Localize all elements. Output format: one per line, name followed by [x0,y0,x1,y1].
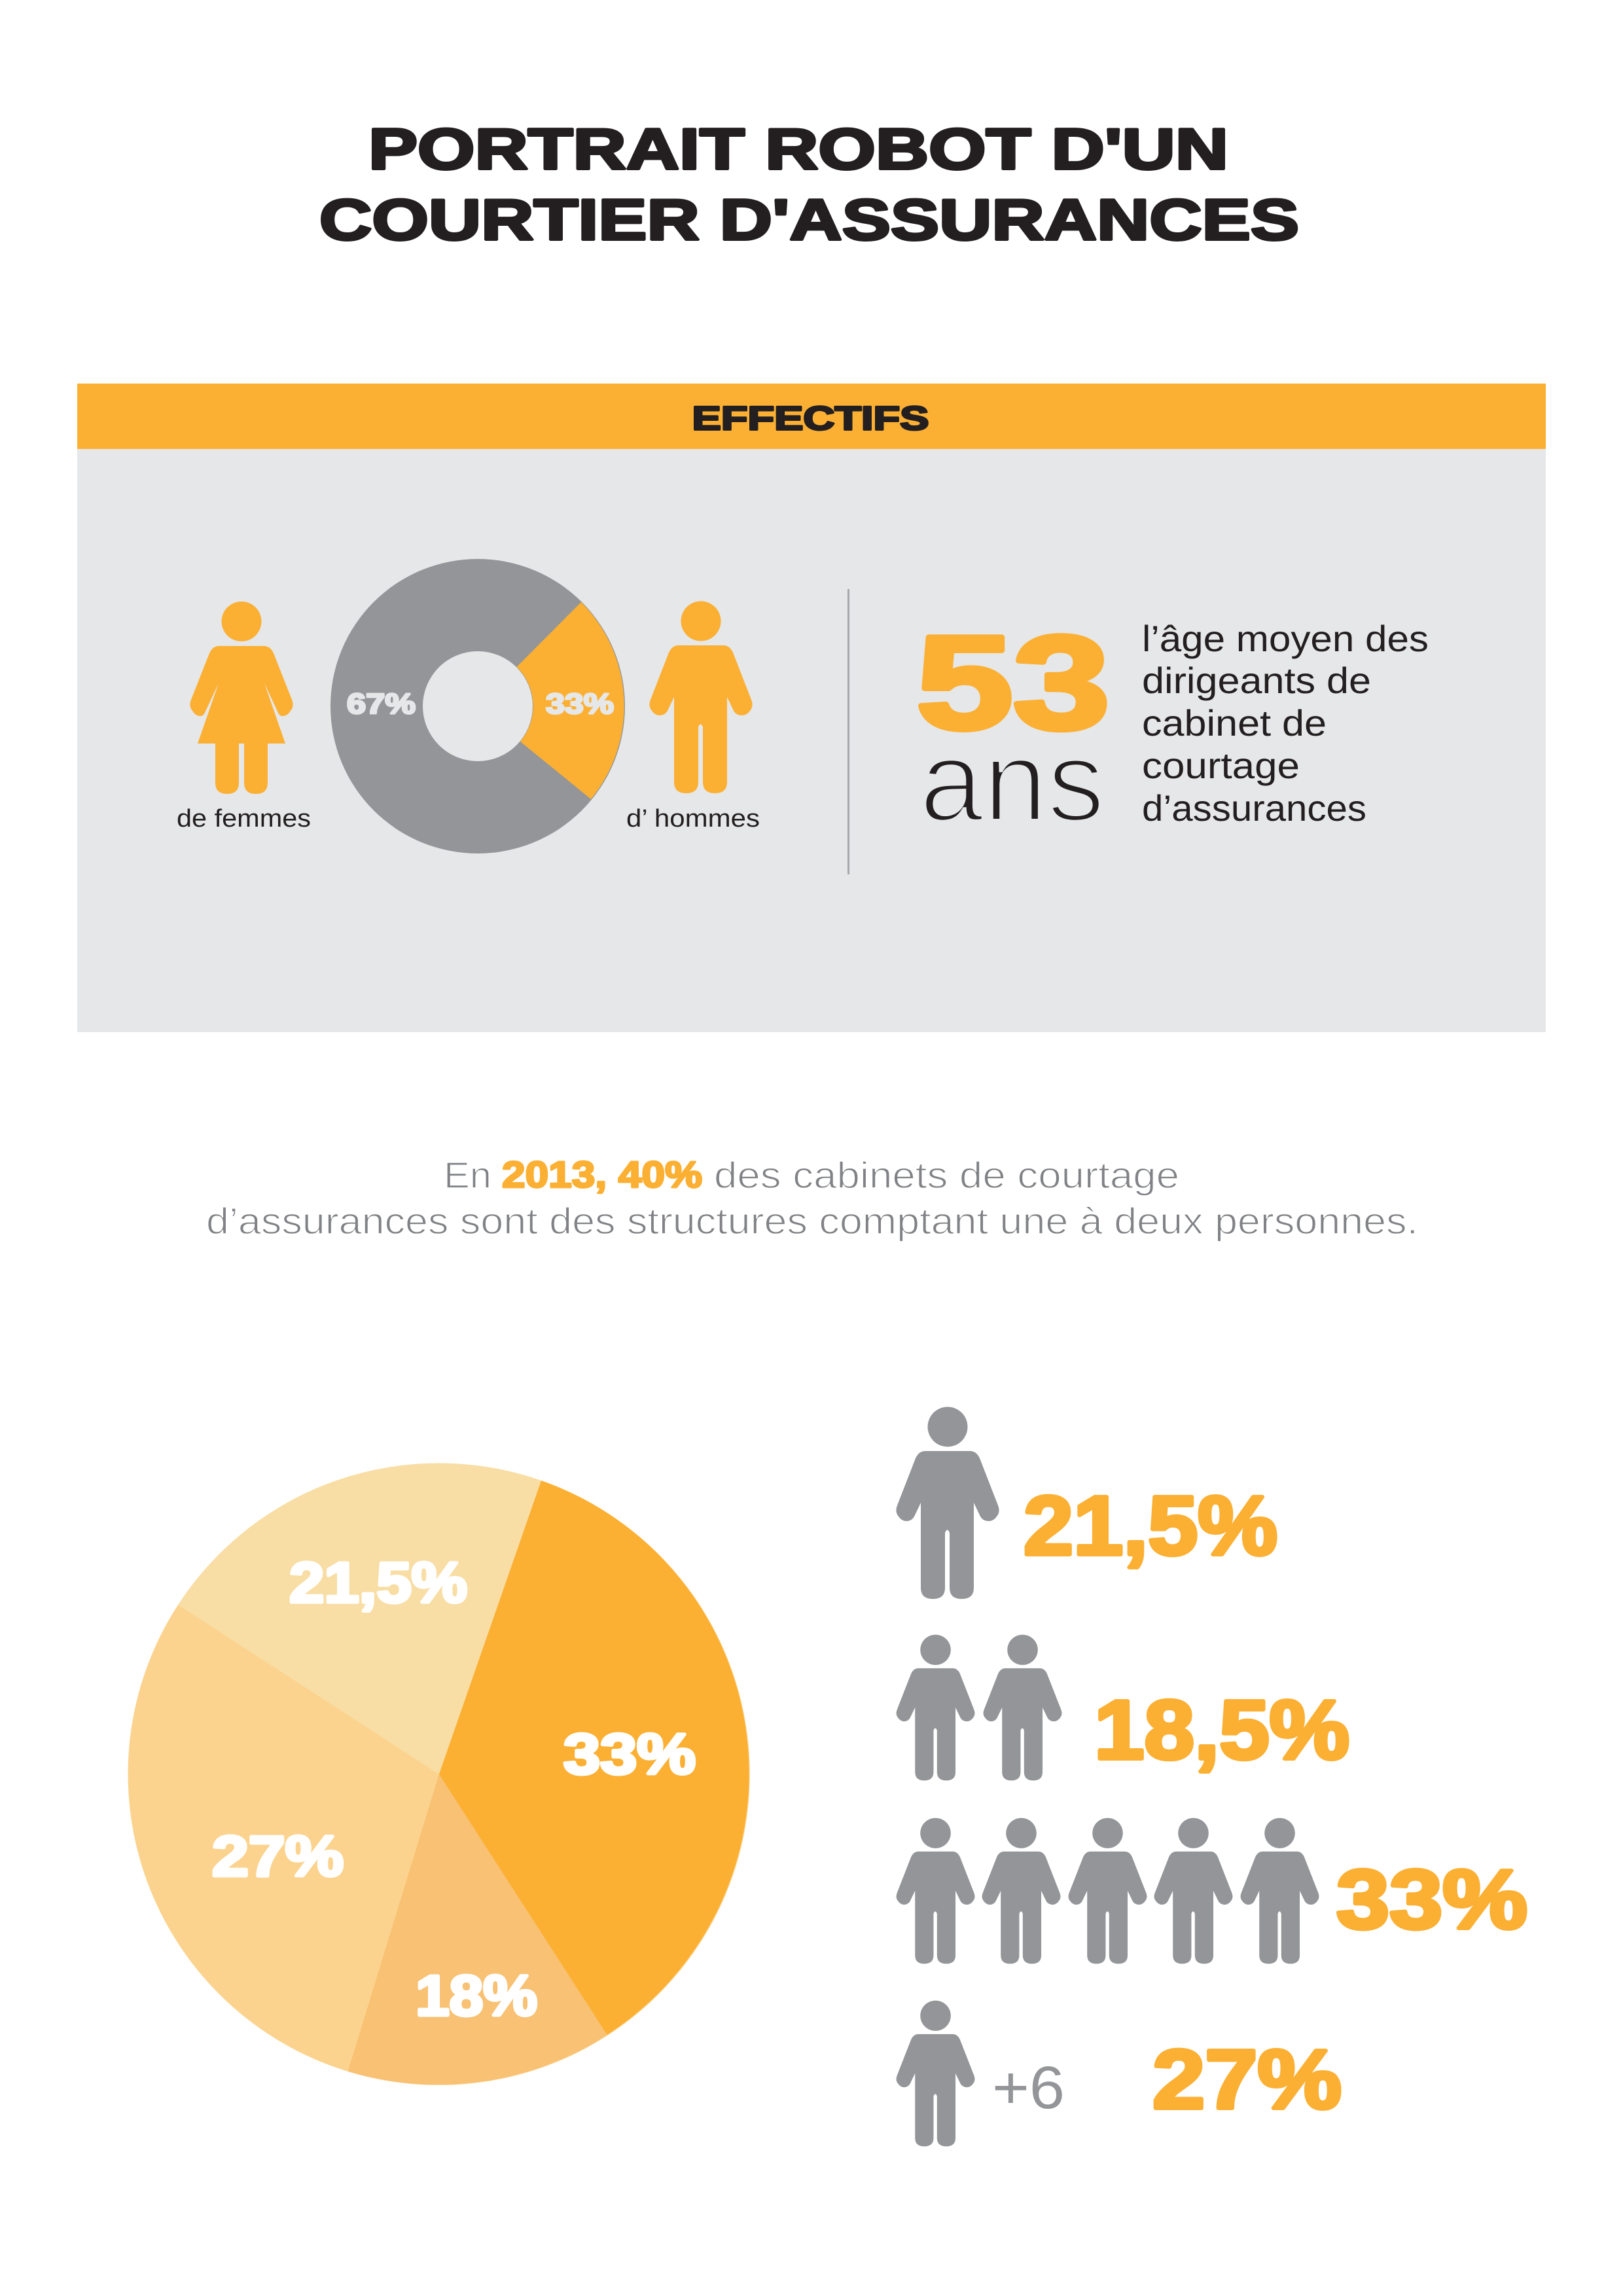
value: 21,5% [1024,1479,1277,1573]
section header bar [77,384,1546,449]
pie labels: 33% [563,1723,696,1786]
pie labels: 21,5% [289,1551,467,1615]
row: five people, 33% [897,1818,1527,1964]
value: 18,5% [1094,1683,1349,1777]
sentence: 2013 statistic: 2013, 40% [502,1154,702,1196]
sentence: 2013 statistic: des cabinets de courtage [714,1155,1179,1196]
row: two people, 18,5% [897,1635,1349,1780]
age description: courtage [1142,745,1300,786]
title: COURTIER D'ASSURANCES [319,187,1299,252]
vertical divider [847,589,849,874]
age description: l’âge moyen des [1142,618,1429,659]
icons: five people [897,1818,1319,1964]
icon: large person [896,1407,999,1599]
donut chart: gender split: 33% [546,688,614,720]
icon: man [649,601,753,793]
panel: effectifs [77,384,1546,1032]
value: 27% [1152,2033,1342,2126]
donut chart: gender split [330,559,625,853]
slice: 27% [128,1605,439,2072]
age description [1142,618,1429,829]
pie labels [212,1551,696,2028]
age description: cabinet de [1142,702,1327,744]
value: 33% [1336,1853,1527,1946]
slice: 21,5% [178,1463,541,1774]
label: women: de femmes [177,805,311,833]
age description: dirigeants de [1142,660,1371,701]
row: one person, 21,5% [896,1407,1277,1599]
slice: 18% [348,1774,607,2085]
sentence: 2013 statistic: d’assurances sont des structures comptant une à deux personnes. [206,1200,1418,1242]
label: +6: +6 [992,2054,1065,2121]
stat unit: ans: ans [919,717,1105,846]
pie chart: cabinet sizes [128,1463,750,2085]
sentence: 2013 statistic: En [444,1155,491,1196]
slice: 33% [439,1480,749,2035]
icon: woman [190,601,293,794]
title: PORTRAIT ROBOT D'UN [368,117,1228,181]
section heading: EFFECTIFS [692,399,929,437]
age description: d’assurances [1142,787,1366,829]
panel background [77,449,1546,1032]
sentence: 2013 statistic [206,1154,1418,1242]
pie labels: 18% [416,1964,537,2028]
stat: 53: 53 [916,609,1110,757]
title [319,117,1299,252]
label: men: d’ hommes [626,805,760,833]
icon: person [897,2001,974,2146]
row: six plus people, 27% [897,2001,1342,2146]
icons: two people [897,1635,1061,1780]
donut chart: gender split: 67% [347,688,416,720]
pie labels: 27% [212,1825,344,1888]
